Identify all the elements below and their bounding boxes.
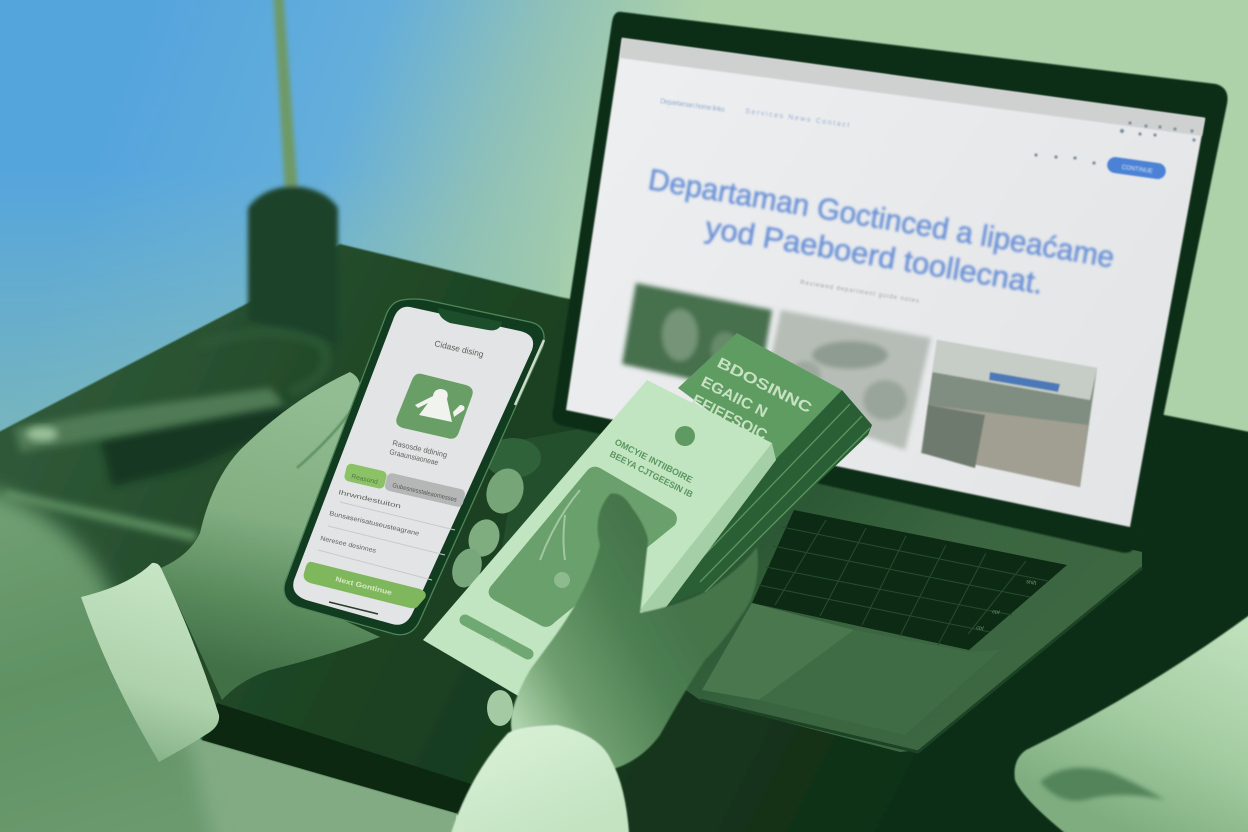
sleeve: left arm [0, 480, 220, 832]
laptop front edge [700, 568, 1142, 752]
phone primary button [304, 562, 426, 608]
left hand [161, 372, 380, 700]
site photo right [921, 340, 1097, 487]
phone list rows: Ihrwndestuiton [338, 489, 402, 510]
key labels: ctrl [976, 625, 984, 632]
phone description: Rasosde ddining [392, 438, 448, 460]
lamp [248, 0, 338, 345]
pale device on desk [14, 388, 285, 452]
back booklet cover: BDOSINNC [714, 354, 815, 417]
laptop deck [500, 425, 1142, 752]
phone screen [293, 307, 533, 625]
phone grey tab: Gubesnesstaleaomesses [392, 482, 458, 504]
booklet button [465, 620, 528, 655]
trackpad [702, 603, 854, 700]
browser bar [620, 38, 1205, 136]
floor region below desk [100, 720, 456, 832]
lamp base [248, 186, 338, 345]
phone green tab: Reasond [351, 473, 379, 486]
phone notch [438, 308, 502, 330]
key labels: ctrl [992, 609, 1000, 616]
app icon figure [415, 389, 464, 422]
key labels [976, 579, 1037, 632]
desk surface [0, 244, 1248, 832]
phone description [389, 438, 448, 467]
blurred desk objects [5, 332, 326, 542]
back booklet cover [678, 333, 842, 460]
keyboard [752, 510, 1067, 650]
shirt cuff right [446, 725, 630, 832]
site headline: yod Paeboerd toollecnat. [703, 211, 1046, 301]
cable loop [200, 332, 326, 392]
phone grey tab [384, 472, 466, 508]
page edges [690, 404, 870, 592]
lamp pole [273, 0, 298, 192]
phone description: Graaunsiaoneae [389, 447, 439, 467]
phone green tab [343, 463, 387, 489]
palm rest right [759, 630, 1000, 735]
laptop screen [566, 38, 1205, 527]
booklets [423, 333, 872, 697]
wall lower tint [0, 170, 560, 450]
phone body [284, 299, 544, 635]
phone list rows: Bunsaserisatuseusteagrane [329, 510, 420, 538]
left hand fingers behind phone [447, 438, 541, 592]
booklet seal [675, 426, 695, 446]
site subline: Reviewed department guide notes [800, 280, 919, 305]
paper fold shadow [1040, 768, 1165, 801]
palm crease [297, 405, 355, 468]
site photo left [622, 283, 772, 394]
folded paper, bottom right [1014, 600, 1248, 832]
booklet button: Open now [487, 637, 512, 655]
laptop lid bezel [552, 12, 1228, 553]
blue button on site [1106, 156, 1167, 180]
phone list rows [318, 489, 455, 580]
blue button on site: CONTINUE [1121, 165, 1153, 175]
browser nav text: Services News Contact [745, 108, 850, 129]
phone primary button: Next Gontinue [335, 576, 393, 597]
desk front highlight [5, 490, 197, 542]
dark box on desk [100, 402, 285, 487]
booklet heading: OMCYIE INTIIBOIRE [613, 437, 694, 485]
front booklet cover [423, 380, 772, 697]
laptop [500, 12, 1228, 752]
back booklet cover: EGAIIC N [698, 373, 770, 421]
booklet edge [640, 443, 776, 622]
small finger under booklet [487, 690, 513, 726]
phone home bar [329, 602, 378, 614]
site headline: Departaman Goctinced a lipeaćame [646, 163, 1117, 275]
device highlight [26, 427, 58, 441]
browser toolbar icons [1034, 121, 1196, 165]
booklet picture panel [489, 467, 677, 627]
booklet heading: BEEYA CJTGEESIN IB [608, 449, 695, 500]
site photo middle [762, 310, 931, 450]
right hand [511, 494, 758, 770]
phone side highlight [515, 340, 544, 405]
back booklet cover: EFIEFSOIC [689, 391, 770, 444]
phone list rows: Neresee desinnes [320, 535, 377, 555]
browser nav text [660, 98, 850, 129]
app icon [396, 374, 473, 439]
key labels: shift [1026, 579, 1037, 587]
browser nav text: Departaman home links [660, 98, 726, 114]
phone [284, 299, 544, 635]
desk front edge [202, 703, 490, 813]
phone title: Cidase dising [434, 338, 485, 359]
shirt cuff left [81, 563, 219, 762]
page stack [640, 390, 872, 612]
